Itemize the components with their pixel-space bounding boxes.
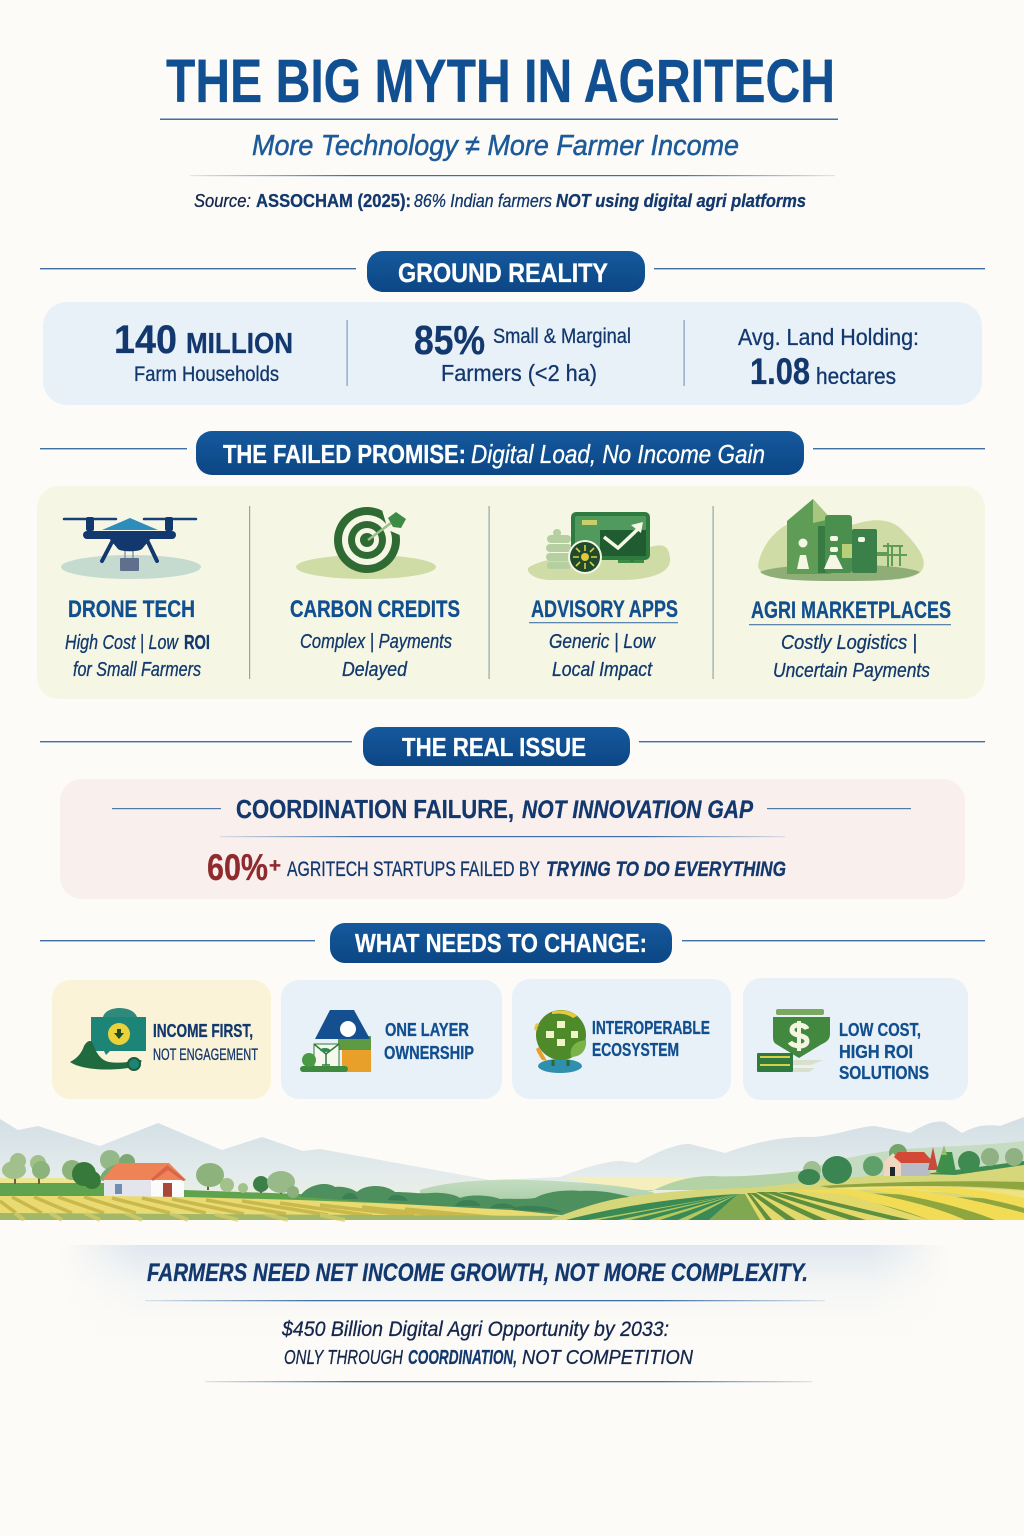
text: one layer ownership: ONE LAYER (385, 1020, 469, 1040)
statistic: 60 percent failed: 60% (207, 847, 268, 888)
heading: coordination failure: NOT INNOVATION GAP (522, 796, 753, 824)
stat: small and marginal farmers: Farmers (<2 ha) (441, 360, 597, 386)
section header: the real issue: THE REAL ISSUE (402, 732, 586, 762)
statistic: 60 percent failed: AGRITECH STARTUPS FAILED BY (287, 858, 540, 881)
label: advisory apps: ADVISORY APPS (531, 596, 678, 623)
icon: advisory app monitor (528, 512, 670, 580)
label: agri marketplaces: AGRI MARKETPLACES (751, 597, 951, 624)
footer opportunity text: $450 Billion Digital Agri Opportunity by 2033: (281, 1318, 669, 1341)
card: one layer ownership (281, 980, 502, 1099)
pale wheat wedge (560, 1177, 706, 1191)
text: one layer ownership (384, 1020, 474, 1063)
label: carbon credits (290, 596, 460, 681)
title: THE BIG MYTH IN AGRITECH (166, 47, 835, 115)
panel: the real issue (60, 779, 965, 899)
section header: the real issue (40, 727, 985, 766)
stat: farm households: MILLION (186, 328, 293, 360)
text: low cost high roi solutions: SOLUTIONS (839, 1063, 929, 1083)
field rows: pale back bands (820, 1181, 1024, 1190)
section header: what needs to change: WHAT NEEDS TO CHANGE: (355, 928, 647, 958)
statistic: 60 percent failed: TRYING TO DO EVERYTHING (546, 858, 786, 881)
label: advisory apps: Local Impact (552, 659, 653, 681)
panel: failed promise (37, 486, 985, 699)
icon: income hand with screen (70, 1008, 146, 1070)
icon: target with arrow (296, 507, 436, 579)
mid hill right of centre (640, 1170, 860, 1191)
stat: average land holding: hectares (816, 363, 896, 389)
stat: average land holding: Avg. Land Holding: (738, 324, 919, 350)
stat: farm households (114, 318, 293, 386)
stat: small and marginal farmers: Small & Marginal (493, 325, 631, 348)
label: drone tech: DRONE TECH (68, 596, 195, 623)
left wheat strip (0, 1178, 75, 1184)
label: advisory apps: Generic | Low (549, 631, 656, 653)
field rows: centre strip (709, 1194, 760, 1220)
statistic: 60 percent failed: + (269, 855, 281, 877)
subtitle: More Technology ≠ More Farmer Income (252, 130, 739, 162)
text: one layer ownership: OWNERSHIP (384, 1043, 474, 1063)
source line (194, 191, 806, 211)
label: drone tech: for Small Farmers (73, 659, 201, 681)
card: income first (52, 980, 271, 1099)
text: interoperable ecosystem: ECOSYSTEM (592, 1040, 679, 1060)
section header: ground reality: GROUND REALITY (398, 258, 608, 288)
icon: marketplace buildings (758, 499, 924, 581)
text: low cost high roi solutions: LOW COST, (839, 1020, 921, 1040)
hedge row (300, 1184, 630, 1216)
label: agri marketplaces: Uncertain Payments (773, 660, 930, 682)
right house (884, 1145, 956, 1176)
label: drone tech: High Cost | Low (65, 632, 179, 654)
text: low cost high roi solutions: HIGH ROI (839, 1042, 913, 1062)
field rows: right olive ground (790, 1190, 1024, 1220)
text: income first (153, 1021, 258, 1064)
footer opportunity text: ONLY THROUGH (284, 1347, 403, 1369)
section header: the failed promise: Digital Load, No Income Gain (471, 439, 765, 469)
label: carbon credits: CARBON CREDITS (290, 596, 460, 623)
section header: ground reality (40, 251, 985, 292)
stat: farm households: 140 (114, 318, 177, 362)
right field base (552, 1165, 1024, 1220)
field rows: bright yellow curves (790, 1189, 965, 1220)
source line: Source: (194, 191, 251, 211)
text: income first: NOT ENGAGEMENT (153, 1046, 258, 1064)
stat: farm households: Farm Households (134, 363, 279, 386)
mountains (0, 1117, 1024, 1215)
icon: drone (61, 517, 201, 579)
left trees (2, 1150, 299, 1198)
label: drone tech: ROI (184, 632, 210, 654)
label: carbon credits: Complex | Payments (300, 631, 452, 653)
field rows: right fan (745, 1190, 929, 1220)
card: low cost high roi (743, 978, 968, 1100)
label: drone tech (65, 596, 210, 681)
footer opportunity text: NOT COMPETITION (522, 1347, 693, 1369)
left wheat field (0, 1196, 570, 1220)
source line: 86% Indian farmers (414, 191, 552, 211)
footer band (60, 1245, 950, 1382)
source line: ASSOCHAM (2025): (256, 191, 411, 211)
footer opportunity text (281, 1318, 693, 1369)
stat: average land holding (738, 324, 919, 392)
label: agri marketplaces (749, 597, 951, 682)
section header: what needs to change (40, 923, 985, 963)
label: carbon credits: Delayed (342, 659, 408, 681)
statistic: 60 percent failed (207, 847, 786, 888)
icon: money bag with bills (757, 1009, 830, 1072)
label: agri marketplaces: Costly Logistics | (781, 632, 917, 654)
mid hill left of centre (420, 1180, 655, 1215)
heading: coordination failure (236, 794, 753, 824)
footer opportunity text: COORDINATION, (408, 1347, 517, 1369)
text: interoperable ecosystem: INTEROPERABLE (592, 1018, 710, 1038)
text: low cost high roi solutions (839, 1020, 929, 1083)
footer headline: FARMERS NEED NET INCOME GROWTH, NOT MORE COMPLEXITY. (147, 1259, 808, 1287)
card: interoperable ecosystem (512, 979, 731, 1099)
text: interoperable ecosystem (592, 1018, 710, 1060)
stat: small and marginal farmers: 85% (414, 317, 485, 363)
illustration: farm landscape (0, 1117, 1024, 1220)
label: advisory apps (529, 596, 678, 681)
panel: ground reality stats (43, 302, 982, 405)
text: income first: INCOME FIRST, (153, 1021, 253, 1041)
heading: coordination failure: COORDINATION FAILURE, (236, 794, 514, 824)
icon: layered house (300, 1010, 371, 1072)
front green strip (0, 1213, 560, 1220)
section header: the failed promise (40, 431, 985, 475)
field rows: green fan (566, 1194, 738, 1220)
icon: ecosystem globe (536, 1010, 586, 1073)
stat: average land holding: 1.08 (750, 351, 810, 392)
distant tree-line hill right (800, 1141, 1024, 1190)
section header: the failed promise: THE FAILED PROMISE: (223, 439, 466, 469)
left house (102, 1163, 186, 1198)
green meadow (0, 1183, 540, 1212)
right trees (798, 1144, 1024, 1185)
source line: NOT using digital agri platforms (556, 191, 806, 211)
stat: small and marginal farmers (414, 317, 631, 386)
